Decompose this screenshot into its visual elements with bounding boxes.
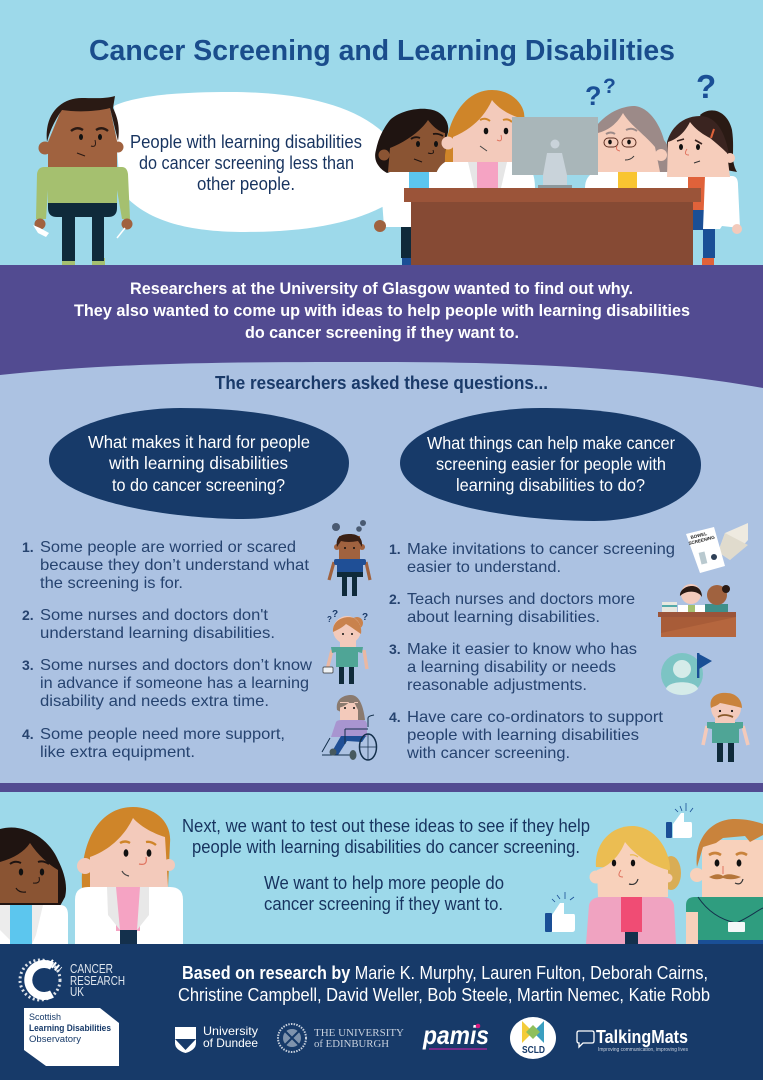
list: solutions: [389, 541, 675, 762]
logo: University of Dundee: [175, 1024, 258, 1053]
character: doctor with ponytail: [667, 110, 742, 265]
icon: care co-ordinator: [703, 693, 748, 762]
solution 3: [389, 641, 637, 694]
question oval: right: screening easier for people with: [436, 454, 666, 474]
barrier 1: 1.: [22, 539, 34, 555]
list: barriers: [22, 539, 312, 761]
speech bubble text: [130, 132, 362, 194]
credits text: Christine Campbell, David Weller, Bob Steele, Martin Nemec, Katie Robb: [178, 985, 710, 1005]
barrier 4: 4.: [22, 726, 34, 742]
logo: Scottish Learning Disabilities Observatory: Learning Disabilities: [29, 1023, 111, 1033]
character: doctor with dark hair behind desk: [374, 109, 448, 266]
logo: Cancer Research UK: UK: [70, 985, 85, 999]
next steps text: cancer screening if they want to.: [264, 894, 503, 914]
credits text: Based on research by Marie K. Murphy, Lauren Fulton, Deborah Cairns,: [182, 963, 708, 983]
question oval: left: to do cancer screening?: [112, 475, 285, 495]
solution 1: Make invitations to cancer screening: [407, 541, 675, 558]
logo: PAMIS: pamis: [422, 1020, 489, 1050]
logo: Talking Mats: [577, 1027, 688, 1053]
icon: screening letter and envelope: SCREENING: [688, 535, 716, 546]
barrier 2: understand learning disabilities.: [40, 625, 275, 642]
character: doctor with ginger hair, lower: [75, 807, 183, 944]
question oval: right: [400, 408, 701, 521]
question oval: left: [49, 408, 349, 519]
logo: Talking Mats: TalkingMats: [596, 1027, 688, 1047]
barrier 3: in advance if someone has a learning: [40, 675, 309, 692]
barrier 1: Some people are worried or scared: [40, 539, 296, 556]
solution 1: easier to understand.: [407, 559, 561, 576]
icon: screening letter and envelope: BOWEL: [690, 531, 708, 540]
icon: two staff at desk: [658, 584, 736, 637]
character: doctor with grey hair and glasses: [585, 106, 688, 188]
barrier 4: like extra equipment.: [40, 744, 195, 761]
next steps text: [182, 816, 590, 914]
character: woman with blonde hair: [586, 826, 681, 944]
panel: next steps sky background: [0, 792, 763, 944]
barrier 1: because they don’t understand what: [40, 557, 310, 574]
barrier 3: 3.: [22, 657, 34, 673]
barrier 1: [22, 539, 310, 592]
question oval: right: learning disabilities to do?: [456, 475, 645, 495]
solution 2: about learning disabilities.: [407, 609, 600, 626]
solution 3: 3.: [389, 641, 401, 657]
barrier 3: [22, 657, 312, 710]
solution 4: 4.: [389, 709, 401, 725]
intro text: Researchers at the University of Glasgow wanted to find out why.: [130, 279, 633, 298]
logo: University of Edinburgh: [278, 1024, 404, 1052]
panel: purple intro band: [0, 265, 763, 388]
logo: SCLD: [510, 1017, 556, 1059]
character: doctor with dark hair, lower left: [0, 827, 68, 944]
barrier 1: the screening is for.: [40, 575, 183, 592]
icon: confused nurse: ?: [362, 612, 368, 623]
logo: University of Dundee: of Dundee: [203, 1036, 258, 1050]
icon: question marks: ?: [696, 68, 716, 105]
barrier 2: Some nurses and doctors don't: [40, 607, 269, 624]
next steps text: people with learning disabilities do cancer screening.: [192, 837, 580, 857]
barrier 4: [22, 726, 285, 761]
icon: question marks: ?: [585, 81, 602, 111]
icon: question marks: [585, 68, 716, 111]
panel: footer: [0, 944, 763, 1080]
question oval: right: What things can help make cancer: [427, 433, 675, 453]
divider band: purple strip: [0, 783, 763, 792]
next steps text: Next, we want to test out these ideas to see if they help: [182, 816, 590, 836]
solution 4: Have care co-ordinators to support: [407, 709, 664, 726]
logo: Scottish Learning Disabilities Observatory: Scottish: [29, 1012, 61, 1022]
intro text: [74, 279, 690, 342]
solution 1: 1.: [389, 541, 401, 557]
computer monitor: [512, 117, 598, 189]
logo: University of Dundee: University: [203, 1024, 258, 1038]
logo: Cancer Research UK: [20, 960, 125, 1000]
icon: thumbs up, lower: [545, 892, 575, 932]
solution 3: a learning disability or needs: [407, 659, 616, 676]
icon: confused nurse: ?: [332, 609, 338, 620]
credits text: [178, 963, 710, 1005]
icon: person with flag: [661, 653, 712, 695]
barrier 4: Some people need more support,: [40, 726, 285, 743]
title: Cancer Screening and Learning Disabilities: [89, 35, 675, 67]
character: man in green jumper: [33, 96, 132, 265]
speech bubble: [114, 92, 386, 232]
speech bubble text: do cancer screening less than: [139, 153, 354, 173]
icon: person in wheelchair: [322, 695, 376, 760]
solution 4: people with learning disabilities: [407, 727, 639, 744]
icon: thumbs up, upper: [666, 803, 693, 838]
icon: screening letter and envelope: [686, 523, 748, 573]
panel: top sky background: [0, 0, 763, 266]
logo: Scottish Learning Disabilities Observatory: Observatory: [29, 1034, 82, 1044]
icon: confused nurse: ?: [327, 615, 332, 624]
logo: Scottish Learning Disabilities Observatory: [24, 1008, 119, 1066]
next steps text: We want to help more people do: [264, 873, 504, 893]
solution 2: [389, 591, 635, 626]
icon: confused nurse: [323, 609, 368, 684]
barrier 2: [22, 607, 275, 642]
question oval: left: What makes it hard for people: [88, 432, 310, 452]
solution 4: with cancer screening.: [406, 745, 570, 762]
logo: University of Edinburgh: THE UNIVERSITY: [314, 1027, 404, 1039]
solution 1: [389, 541, 675, 576]
logo: Talking Mats: Improving communication, improving lives: [598, 1047, 688, 1053]
logo: SCLD: SCLD: [522, 1045, 545, 1056]
barrier 3: Some nurses and doctors don’t know: [40, 657, 312, 674]
desk: [404, 188, 701, 266]
speech bubble text: other people.: [197, 174, 295, 194]
speech bubble text: People with learning disabilities: [130, 132, 362, 152]
solution 3: reasonable adjustments.: [407, 677, 587, 694]
solution 4: [389, 709, 664, 762]
barrier 3: disability and needs extra time.: [40, 693, 269, 710]
intro text: They also wanted to come up with ideas to help people with learning disabilities: [74, 301, 690, 320]
solution 3: Make it easier to know who has: [407, 641, 637, 658]
logo: Cancer Research UK: RESEARCH: [70, 974, 125, 988]
logo: Cancer Research UK: CANCER: [70, 962, 113, 976]
solution 2: 2.: [389, 591, 401, 607]
question oval: left: with learning disabilities: [108, 453, 288, 473]
character: doctor with ginger hair: [435, 90, 535, 188]
icon: question marks: ?: [603, 75, 616, 98]
barrier 2: 2.: [22, 607, 34, 623]
character: man with moustache and lanyard: [686, 819, 763, 944]
intro text: do cancer screening if they want to.: [245, 323, 519, 342]
panel: light blue questions background: [0, 360, 763, 785]
logo: University of Edinburgh: of EDINBURGH: [314, 1038, 389, 1050]
solution 2: Teach nurses and doctors more: [407, 591, 635, 608]
icon: worried person: [329, 520, 370, 596]
heading: the researchers asked: The researchers asked these questions...: [215, 373, 548, 393]
